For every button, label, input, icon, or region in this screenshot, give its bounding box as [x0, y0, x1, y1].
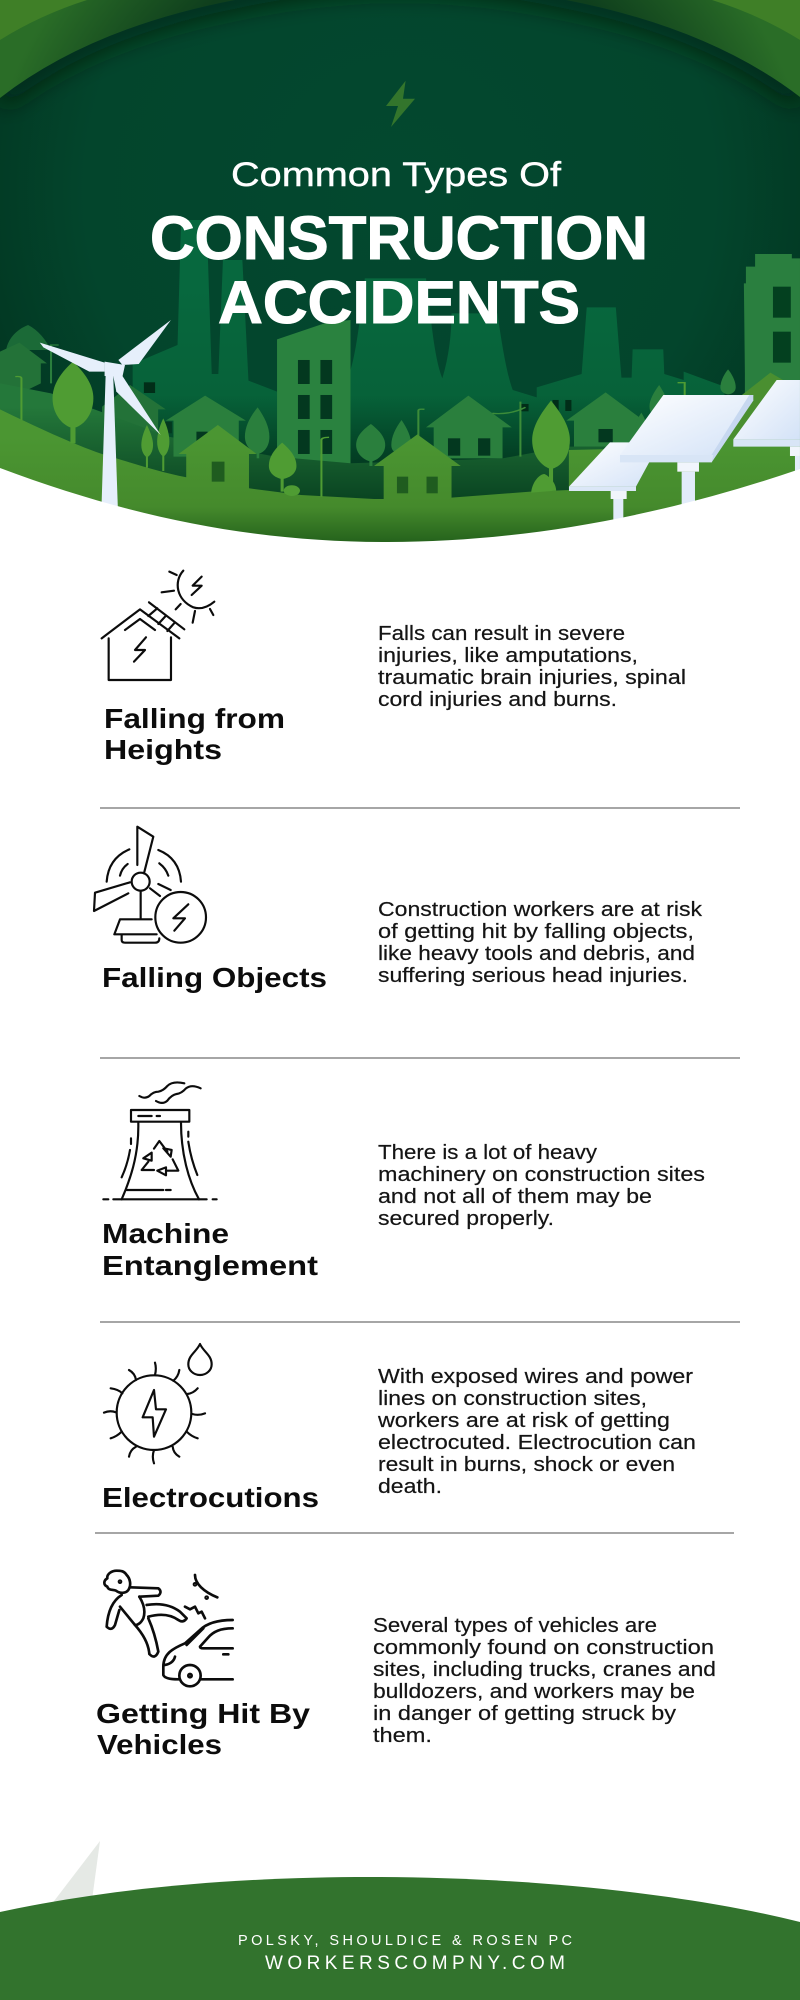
factory chimneys and cooling towers — [133, 220, 724, 470]
description — [378, 899, 703, 987]
description — [378, 623, 686, 711]
heading: Vehicles — [97, 1729, 222, 1760]
background trees — [245, 369, 736, 466]
description: in danger of getting struck by — [373, 1703, 676, 1725]
solar panels — [569, 380, 800, 525]
panel: falling from heights — [102, 571, 686, 765]
heading: Falling Objects — [102, 962, 327, 993]
icon: wind turbine with bolt — [94, 827, 206, 943]
description: commonly found on construction — [373, 1637, 714, 1659]
dark sky background — [0, 0, 800, 412]
description: There is a lot of heavy — [378, 1142, 597, 1164]
description: and not all of them may be — [378, 1186, 652, 1208]
panel: falling objects — [94, 827, 703, 993]
description: lines on construction sites, — [378, 1388, 647, 1410]
description: result in burns, shock or even — [378, 1454, 675, 1476]
front ground with houses — [0, 409, 800, 550]
description: Several types of vehicles are — [373, 1615, 657, 1637]
icon: house with ladder and sun — [102, 571, 214, 680]
description: machinery on construction sites — [378, 1164, 705, 1186]
middle houses — [163, 392, 644, 458]
street lamps — [15, 345, 685, 457]
heading: Falling from — [104, 703, 285, 734]
heading: Machine — [102, 1218, 229, 1249]
icon: sun with bolt and drop — [104, 1344, 212, 1463]
top corner arcs — [0, 0, 800, 120]
description — [373, 1615, 716, 1747]
icon: person hit by car — [104, 1571, 233, 1686]
icon: cooling tower with recycling — [103, 1082, 217, 1199]
wind turbine — [40, 320, 171, 508]
factory windows — [144, 382, 571, 411]
description — [378, 1142, 705, 1230]
panel posts — [611, 447, 800, 525]
description — [377, 1366, 696, 1498]
description: With exposed wires and power — [378, 1366, 693, 1388]
description: them. — [373, 1725, 432, 1747]
white arc under hero — [0, 468, 800, 570]
right panel — [733, 380, 800, 447]
description: like heavy tools and debris, and — [378, 943, 695, 965]
panel: getting hit by vehicles — [96, 1571, 716, 1760]
footer band — [0, 1877, 800, 2000]
tall apartment building — [277, 320, 351, 467]
main title line 2: ACCIDENTS — [218, 269, 580, 336]
right back building — [744, 254, 800, 410]
description: suffering serious head injuries. — [378, 965, 688, 987]
panel: machine entanglement — [102, 1082, 705, 1281]
middle ground — [0, 383, 800, 550]
description: death. — [378, 1476, 442, 1498]
heading — [96, 1698, 310, 1760]
front house windows — [212, 462, 438, 493]
description: traumatic brain injuries, spinal — [378, 667, 686, 689]
panel: electrocutions — [102, 1344, 696, 1513]
title — [150, 156, 648, 336]
heading: Getting Hit By — [96, 1698, 310, 1729]
heading: Entanglement — [102, 1250, 318, 1281]
description: cord injuries and burns. — [378, 689, 617, 711]
heading — [104, 703, 285, 765]
front trees — [53, 362, 570, 497]
description: sites, including trucks, cranes and — [373, 1659, 716, 1681]
description: Construction workers are at risk — [378, 899, 703, 921]
footer — [0, 1877, 800, 2000]
hero illustration — [0, 0, 800, 570]
left panel — [569, 442, 660, 491]
icon: lightning bolt — [386, 81, 415, 127]
heading — [102, 1218, 318, 1281]
description: of getting hit by falling objects, — [378, 921, 694, 943]
heading: Electrocutions — [102, 1482, 319, 1513]
centre panel — [620, 395, 753, 462]
right green hill — [714, 373, 800, 450]
city skyline — [0, 220, 800, 550]
description: Falls can result in severe — [378, 623, 625, 645]
description: secured properly. — [378, 1208, 554, 1230]
description: electrocuted. Electrocution can — [378, 1432, 696, 1454]
description: bulldozers, and workers may be — [373, 1681, 695, 1703]
heading: Heights — [104, 734, 222, 765]
description: workers are at risk of getting — [377, 1410, 670, 1432]
subtitle: Common Types Of — [231, 156, 562, 194]
left back houses — [0, 325, 166, 437]
main title line 1: CONSTRUCTION — [150, 204, 648, 272]
description: injuries, like amputations, — [378, 645, 638, 667]
decorative grey triangle — [51, 1841, 100, 1905]
company name: POLSKY, SHOULDICE & ROSEN PC — [238, 1933, 572, 1949]
website: WORKERSCOMPNY.COM — [265, 1953, 565, 1974]
